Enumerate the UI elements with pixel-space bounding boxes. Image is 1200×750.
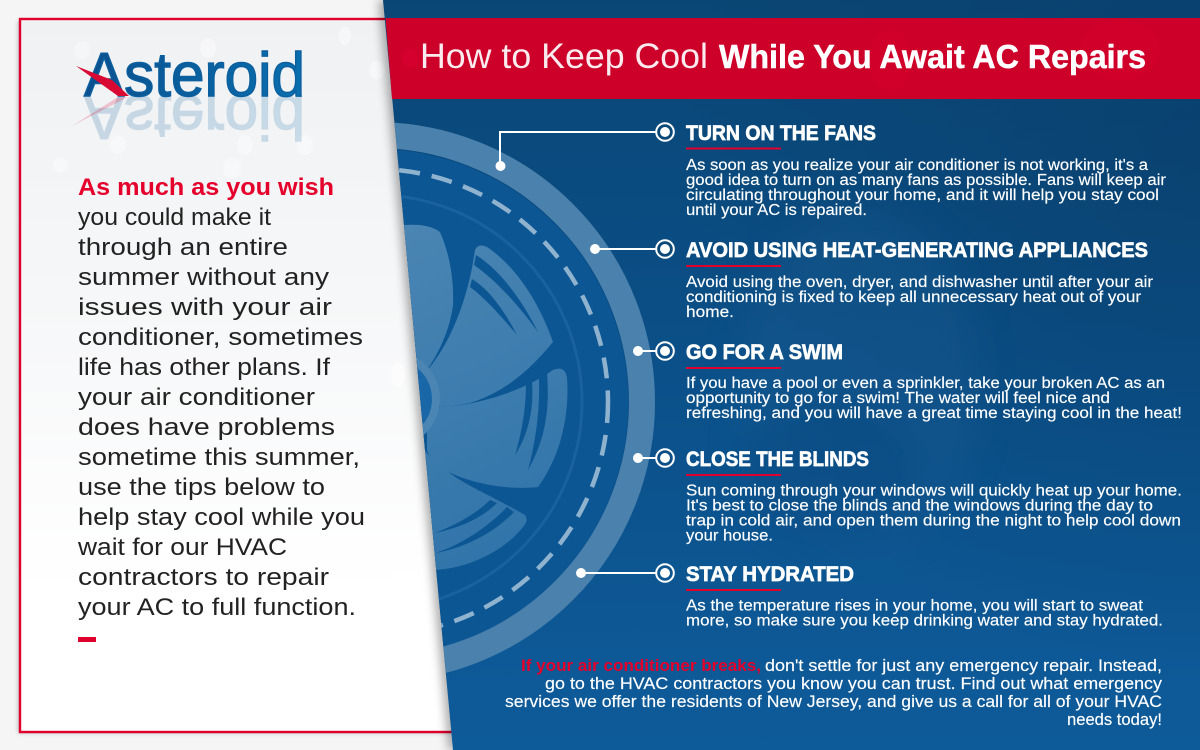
title text: How to Keep Cool	[420, 37, 708, 76]
connector 3	[633, 342, 674, 360]
intro paragraph: help stay cool while you	[78, 504, 365, 531]
tip 4: close the blinds	[633, 448, 1182, 544]
intro paragraph: your AC to full function.	[78, 594, 356, 621]
title banner	[386, 18, 1200, 99]
title text: While You Await AC Repairs	[719, 38, 1146, 75]
tip 3: go for a swim	[633, 341, 1182, 422]
blade slits	[435, 255, 548, 553]
intro paragraph: conditioner, sometimes	[78, 324, 363, 351]
tip 1: turn on the fans: TURN ON THE FANS	[686, 122, 876, 145]
tip 1: turn on the fans: until your AC is repaired.	[686, 202, 867, 219]
intro paragraph: does have problems	[78, 414, 335, 441]
logo: Asteroid	[72, 41, 305, 151]
tip 3: go for a swim: If you have a pool or even a sprinkler, take your broken AC as an	[686, 375, 1165, 392]
connector 2	[590, 240, 674, 258]
tip 2: avoid appliances: AVOID USING HEAT-GENERATING APPLIANCES	[686, 239, 1148, 262]
intro paragraph: you could make it	[78, 204, 271, 231]
closing call to action: don't settle for just any emergency repair. Instead,	[765, 657, 1162, 675]
connector 1	[496, 123, 674, 171]
logo: Asteroid: Asteroid	[84, 82, 305, 151]
tip 5: stay hydrated	[576, 563, 1163, 630]
intro paragraph: sometime this summer,	[78, 444, 360, 471]
red accent bar	[78, 637, 96, 642]
intro paragraph: wait for our HVAC	[77, 534, 287, 561]
fan illustration	[394, 122, 655, 673]
title text	[420, 37, 1146, 76]
tip 3: go for a swim: refreshing, and you will have a great time staying cool in the heat!	[686, 405, 1182, 422]
tip 4: close the blinds: Sun coming through your windows will quickly heat up your home.	[686, 482, 1182, 500]
intro paragraph: your air conditioner	[78, 384, 315, 411]
connector 5	[576, 564, 674, 582]
tip 1: turn on the fans: circulating throughout your home, and it will help you stay cool	[686, 187, 1159, 204]
tip 2: avoid appliances: home.	[686, 304, 734, 321]
tip 1: turn on the fans	[496, 122, 1166, 219]
tip 4: close the blinds: It's best to close the blinds and the windows during the day to	[686, 498, 1153, 514]
intro paragraph: through an entire	[78, 234, 288, 261]
tip 5: stay hydrated: STAY HYDRATED	[686, 563, 854, 586]
connector 4	[633, 449, 674, 467]
panel: intro card	[18, 19, 460, 733]
closing call to action: needs today!	[1067, 711, 1162, 729]
closing call to action: If your air conditioner breaks,	[521, 657, 761, 675]
tip 4: close the blinds: your house.	[686, 528, 773, 544]
tip 2: avoid appliances: Avoid using the oven, dryer, and dishwasher until after your air	[686, 274, 1153, 291]
closing call to action	[505, 657, 1163, 729]
fan blades	[400, 225, 567, 570]
intro paragraph: life has other plans. If	[78, 354, 330, 381]
intro paragraph: contractors to repair	[78, 564, 329, 591]
tip 3: go for a swim: GO FOR A SWIM	[686, 341, 843, 364]
intro paragraph	[77, 174, 365, 621]
intro paragraph: issues with your air	[78, 294, 332, 321]
intro paragraph: As much as you wish	[78, 174, 334, 201]
tip 2: avoid appliances	[590, 239, 1153, 321]
logo: Asteroid: Asteroid	[84, 41, 305, 110]
tip 5: stay hydrated: As the temperature rises in your home, you will start to sweat	[686, 598, 1144, 614]
tip 4: close the blinds: trap in cold air, and open them during the night to help cool down	[686, 512, 1181, 530]
tip 1: turn on the fans: As soon as you realize your air conditioner is not working, it's a	[686, 157, 1148, 174]
intro paragraph: summer without any	[78, 264, 329, 291]
fan hub	[416, 358, 440, 435]
tip 4: close the blinds: CLOSE THE BLINDS	[686, 448, 869, 471]
panel: blue background	[383, 0, 1200, 750]
tip 1: turn on the fans: good idea to turn on as many fans as possible. Fans will keep air	[686, 172, 1166, 189]
intro paragraph: use the tips below to	[78, 474, 325, 501]
tip 3: go for a swim: opportunity to go for a swim! The water will feel nice and	[686, 390, 1110, 407]
closing call to action: go to the HVAC contractors you know you can trust. Find out what emergency	[545, 675, 1163, 693]
tip 5: stay hydrated: more, so make sure you keep drinking water and stay hydrated.	[686, 612, 1163, 630]
tip 2: avoid appliances: conditioning is fixed to keep all unnecessary heat out of your	[686, 289, 1141, 306]
closing call to action: services we offer the residents of New Jersey, and give us a call for all of your HVAC	[505, 693, 1162, 711]
